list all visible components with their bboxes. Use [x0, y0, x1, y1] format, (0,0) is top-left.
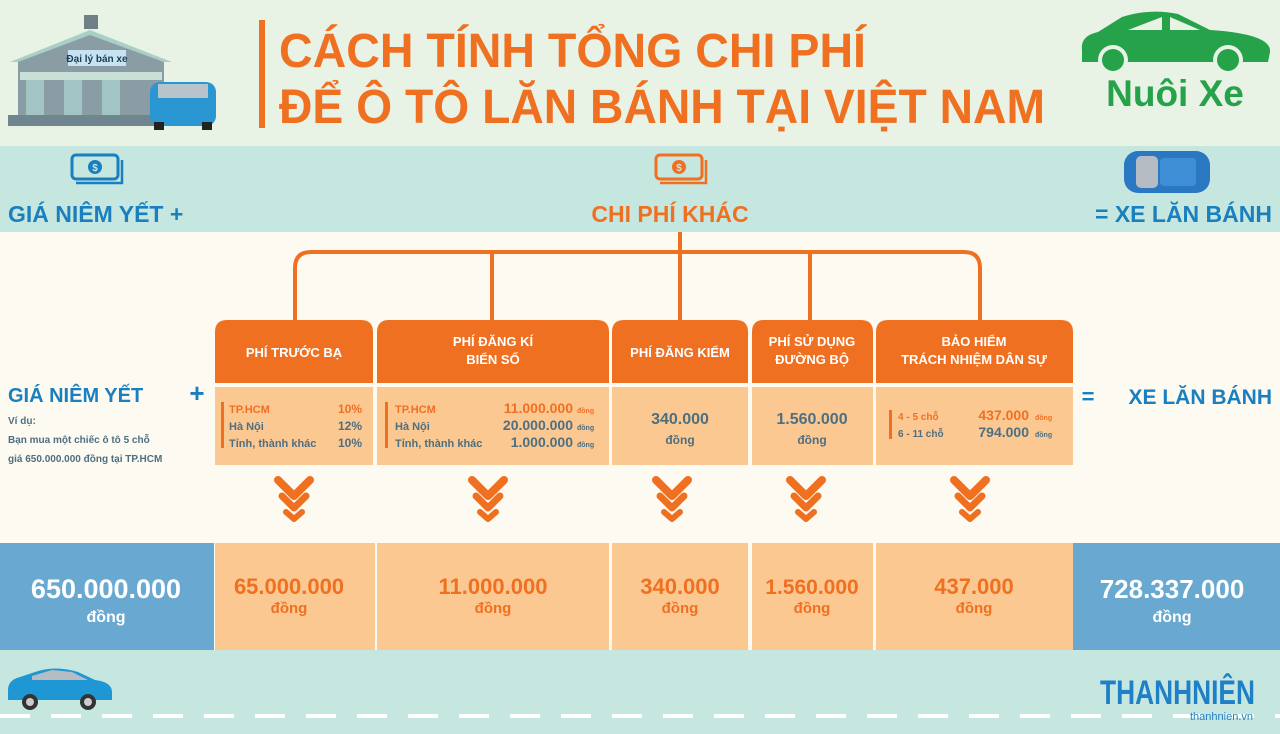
- icon: money center: $: [676, 163, 682, 174]
- result row: 650.000.000: [31, 574, 181, 604]
- label: GIÁ NIÊM YẾT +: GIÁ NIÊM YẾT +: [8, 200, 183, 227]
- result row: đồng: [475, 600, 511, 617]
- result row: đồng: [662, 600, 698, 617]
- left text: giá niêm yết: giá 650.000.000 đồng tại TP.HCM: [8, 453, 162, 465]
- title: [259, 20, 1045, 134]
- icon: money left: [72, 155, 122, 183]
- logo: Nuôi Xe: Nuôi Xe: [1106, 73, 1244, 114]
- panel: phí đăng kí biển số: [377, 320, 609, 465]
- result row: 728.337.000: [1100, 574, 1244, 604]
- left text: giá niêm yết: GIÁ NIÊM YẾT: [8, 383, 143, 407]
- panel: phí sử dụng đường bộ: [752, 320, 873, 465]
- right text: = xe lăn bánh: =: [1082, 384, 1094, 409]
- icon: money left: $: [92, 163, 98, 174]
- right text: = xe lăn bánh: XE LĂN BÁNH: [1128, 386, 1272, 409]
- panel: phí đăng kí biển số: đồng: [577, 440, 594, 449]
- panel: phí đăng kí biển số: Hà Nội: [395, 421, 430, 433]
- panel: phí đăng kí biển số: TP.HCM: [395, 404, 436, 416]
- panel: phí trước bạ: 12%: [338, 419, 362, 433]
- panel: bảo hiểm trách nhiệm dân sự: BẢO HIỂM: [942, 334, 1006, 349]
- header background: [0, 0, 1280, 146]
- icon: money center: [656, 155, 706, 183]
- panel: phí đăng kí biển số: 20.000.000: [503, 417, 573, 433]
- panel: phí đăng kiểm: 340.000: [651, 411, 709, 428]
- panel: phí sử dụng đường bộ: đồng: [797, 433, 827, 447]
- result row: đồng: [271, 600, 307, 617]
- left text: giá niêm yết: Ví dụ:: [8, 416, 36, 427]
- arrow: column 5: [954, 480, 986, 519]
- panel: phí đăng kí biển số: đồng: [577, 423, 594, 432]
- title: CÁCH TÍNH TỔNG CHI PHÍ: [279, 23, 868, 78]
- title: ĐỂ Ô TÔ LĂN BÁNH TẠI VIỆT NAM: [279, 79, 1045, 134]
- logo: Thanh Niên: [1100, 674, 1255, 723]
- result row: đồng: [794, 600, 830, 617]
- panel: phí đăng kí biển số: Tỉnh, thành khác: [395, 438, 482, 450]
- left text: giá niêm yết: [8, 378, 205, 465]
- icon: blue car footer: [8, 668, 112, 710]
- band background: [0, 146, 1280, 232]
- left text: giá niêm yết: +: [189, 378, 205, 408]
- label: = XE LĂN BÁNH top: = XE LĂN BÁNH: [1095, 200, 1272, 227]
- panel: bảo hiểm trách nhiệm dân sự: đồng: [1035, 430, 1052, 439]
- left text: giá niêm yết: Bạn mua một chiếc ô tô 5 chỗ: [8, 433, 150, 446]
- result row: đồng: [1152, 609, 1192, 626]
- result row: 65.000.000: [234, 574, 344, 599]
- panel: bảo hiểm trách nhiệm dân sự: 437.000: [978, 407, 1029, 423]
- panel: phí trước bạ: 10%: [338, 402, 362, 416]
- icon: car top view: [1124, 151, 1210, 193]
- panel: phí đăng kiểm: PHÍ ĐĂNG KIỂM: [630, 345, 730, 360]
- panel: phí sử dụng đường bộ: ĐƯỜNG BỘ: [775, 352, 849, 367]
- connector tree: [295, 232, 980, 320]
- result row: 340.000: [640, 574, 720, 599]
- panel: phí trước bạ: PHÍ TRƯỚC BẠ: [246, 345, 343, 360]
- panel: bảo hiểm trách nhiệm dân sự: [876, 320, 1073, 465]
- panel: phí trước bạ: Tỉnh, thành khác: [229, 438, 316, 450]
- result row: 1.560.000: [765, 576, 859, 599]
- logo: Thanh Niên: thanhnien.vn: [1190, 711, 1253, 723]
- panel: phí trước bạ: Hà Nội: [229, 421, 264, 433]
- result row: đồng: [956, 600, 992, 617]
- arrow: column 3: [656, 480, 688, 519]
- panel: bảo hiểm trách nhiệm dân sự: 6 - 11 chỗ: [898, 427, 944, 440]
- panel: phí đăng kí biển số: 11.000.000: [504, 400, 573, 416]
- panel: phí trước bạ: [215, 320, 373, 465]
- right text: = xe lăn bánh: [1082, 384, 1272, 409]
- result row: 11.000.000: [439, 574, 547, 599]
- panel: phí đăng kí biển số: PHÍ ĐĂNG KÍ: [453, 334, 533, 349]
- panel: bảo hiểm trách nhiệm dân sự: TRÁCH NHIỆM DÂN SỰ: [901, 352, 1047, 367]
- panel: phí sử dụng đường bộ: 1.560.000: [776, 411, 848, 428]
- panel: phí đăng kí biển số: BIỂN SỐ: [466, 352, 520, 367]
- panel: phí đăng kí biển số: đồng: [577, 406, 594, 415]
- result row: 437.000: [934, 574, 1014, 599]
- arrow: column 1: [278, 480, 310, 519]
- arrow: column 2: [472, 480, 504, 519]
- panel: phí trước bạ: TP.HCM: [229, 404, 270, 416]
- result row: [0, 543, 1280, 650]
- panel: phí đăng kiểm: [612, 320, 748, 465]
- panel: phí đăng kiểm: đồng: [665, 433, 695, 447]
- panel: bảo hiểm trách nhiệm dân sự: đồng: [1035, 413, 1052, 422]
- panel: bảo hiểm trách nhiệm dân sự: 794.000: [978, 424, 1029, 440]
- logo: Nuôi Xe: [1082, 12, 1270, 114]
- label: CHI PHÍ KHÁC: CHI PHÍ KHÁC: [591, 200, 749, 227]
- panel: phí đăng kí biển số: 1.000.000: [511, 434, 573, 450]
- icon: car dealership: Đại lý bán xe: [66, 54, 128, 65]
- result row: đồng: [86, 609, 126, 626]
- arrow: column 4: [790, 480, 822, 519]
- panel: bảo hiểm trách nhiệm dân sự: 4 - 5 chỗ: [898, 410, 939, 423]
- icon: car dealership: [8, 15, 216, 130]
- footer background: [0, 650, 1280, 734]
- panel: phí trước bạ: 10%: [338, 436, 362, 450]
- panel: phí sử dụng đường bộ: PHÍ SỬ DỤNG: [769, 334, 855, 349]
